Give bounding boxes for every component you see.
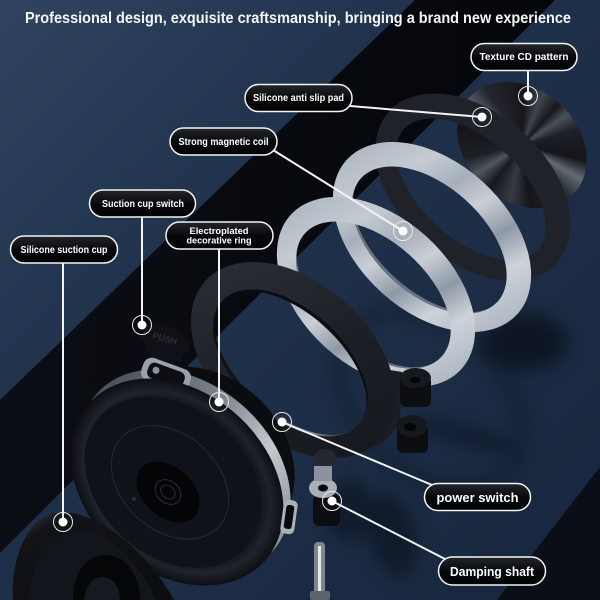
ring: strong magnetic coil, rear [296, 104, 568, 370]
ring: silicone anti slip pad [340, 56, 600, 318]
callout: power switch [272, 412, 530, 510]
silicone suction cup disc [13, 512, 174, 600]
callout: electroplated decorative ring: Electroplated [190, 226, 249, 237]
callout: strong magnetic coil [170, 128, 412, 240]
callout: silicone suction cup: Silicone suction cup [20, 245, 108, 256]
suction cup switch button [138, 322, 190, 362]
callout: power switch: power switch [436, 490, 519, 505]
damping shaft assembly [309, 449, 340, 600]
title: Professional design, exquisite craftsmanship, bringing a brand new experience [25, 10, 571, 27]
side port [280, 499, 298, 535]
disc: texture CD pattern [432, 56, 600, 234]
suction cup switch button: PUSH [151, 330, 178, 347]
silicone front face [29, 336, 325, 600]
callout: damping shaft: Damping shaft [450, 564, 535, 579]
callout: silicone anti slip pad [245, 84, 492, 126]
callout: suction cup switch [90, 190, 196, 334]
callout: strong magnetic coil: Strong magnetic coil [178, 137, 269, 148]
callout: texture CD pattern: Texture CD pattern [480, 52, 568, 63]
main suction body [29, 328, 332, 600]
callout: texture CD pattern [471, 44, 577, 106]
hinge knobs [396, 368, 431, 453]
ring: strong magnetic coil, front [240, 159, 512, 425]
callout: suction cup switch: Suction cup switch [102, 199, 184, 210]
silver switch window [138, 355, 194, 395]
callout: electroplated decorative ring: decorative ring [186, 236, 252, 246]
electroplated decorative ring with hinge tab [153, 223, 433, 497]
callout: damping shaft [322, 492, 546, 585]
central hub [125, 449, 211, 535]
callout: electroplated decorative ring [166, 222, 273, 412]
callout: silicone suction cup [10, 236, 118, 532]
callout: silicone anti slip pad: Silicone anti slip pad [253, 93, 344, 104]
